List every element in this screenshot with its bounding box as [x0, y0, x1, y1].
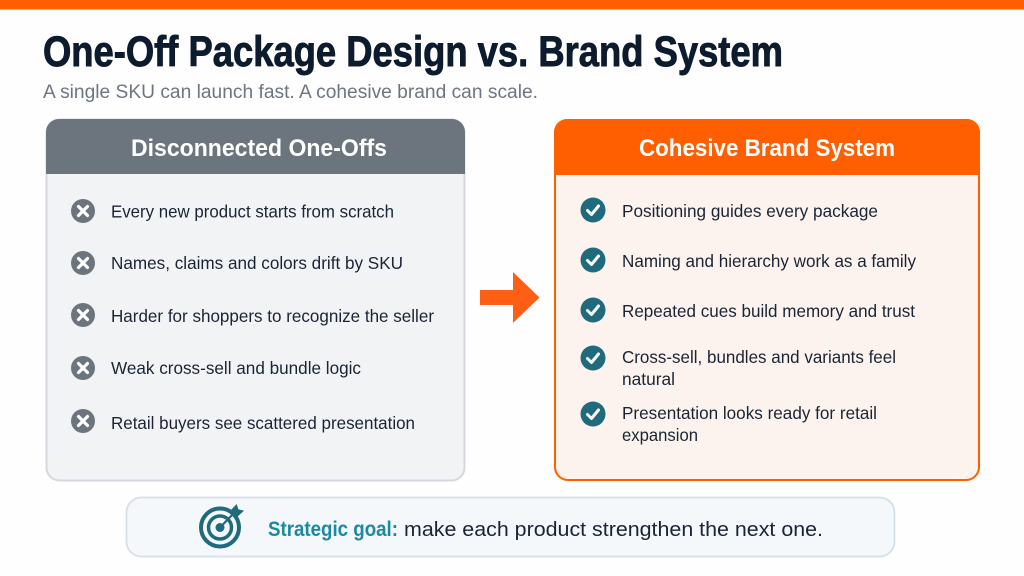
item: cross-sell: natural [622, 369, 675, 389]
top accent bar [0, 0, 1024, 10]
panel heading: Disconnected One-Offs [131, 135, 387, 162]
item: presentation: expansion [622, 425, 698, 445]
item: positioning [580, 198, 878, 222]
item: every new product: Every new product starts from scratch [111, 202, 394, 222]
callout: strategic goal [126, 498, 894, 556]
item: naming [580, 248, 916, 272]
callout text: make each product strengthen the next one. [404, 519, 823, 541]
item: retail buyers: Retail buyers see scattered presentation [111, 413, 415, 433]
item: presentation: Presentation looks ready for retail [622, 403, 877, 423]
icon: target [201, 504, 244, 546]
item: presentation [580, 402, 877, 445]
title: One-Off Package Design vs. Brand System [43, 28, 783, 76]
item: harder for shoppers: Harder for shoppers to recognize the seller [111, 306, 434, 326]
panel background [555, 120, 979, 480]
item: cross-sell: Cross-sell, bundles and variants feel [622, 347, 896, 367]
subtitle: A single SKU can launch fast. A cohesive brand can scale. [43, 82, 538, 103]
callout heading: Strategic goal: [268, 518, 398, 541]
item: cross-sell [580, 346, 896, 389]
panel header [46, 119, 465, 174]
panel heading: Cohesive Brand System [639, 135, 895, 162]
panel: disconnected one-offs [46, 119, 465, 480]
panel background [46, 120, 464, 480]
item: naming: Naming and hierarchy work as a family [622, 251, 916, 271]
panel header [554, 119, 980, 175]
item: names, claims and colors: Names, claims and colors drift by SKU [111, 253, 403, 273]
item: positioning: Positioning guides every package [622, 201, 878, 221]
callout background [126, 498, 894, 556]
panel: cohesive brand system [554, 119, 980, 480]
arrow [480, 272, 540, 323]
item: weak cross-sell: Weak cross-sell and bundle logic [111, 358, 361, 378]
item: repeated cues: Repeated cues build memory and trust [622, 301, 915, 321]
item: repeated cues [580, 298, 915, 322]
